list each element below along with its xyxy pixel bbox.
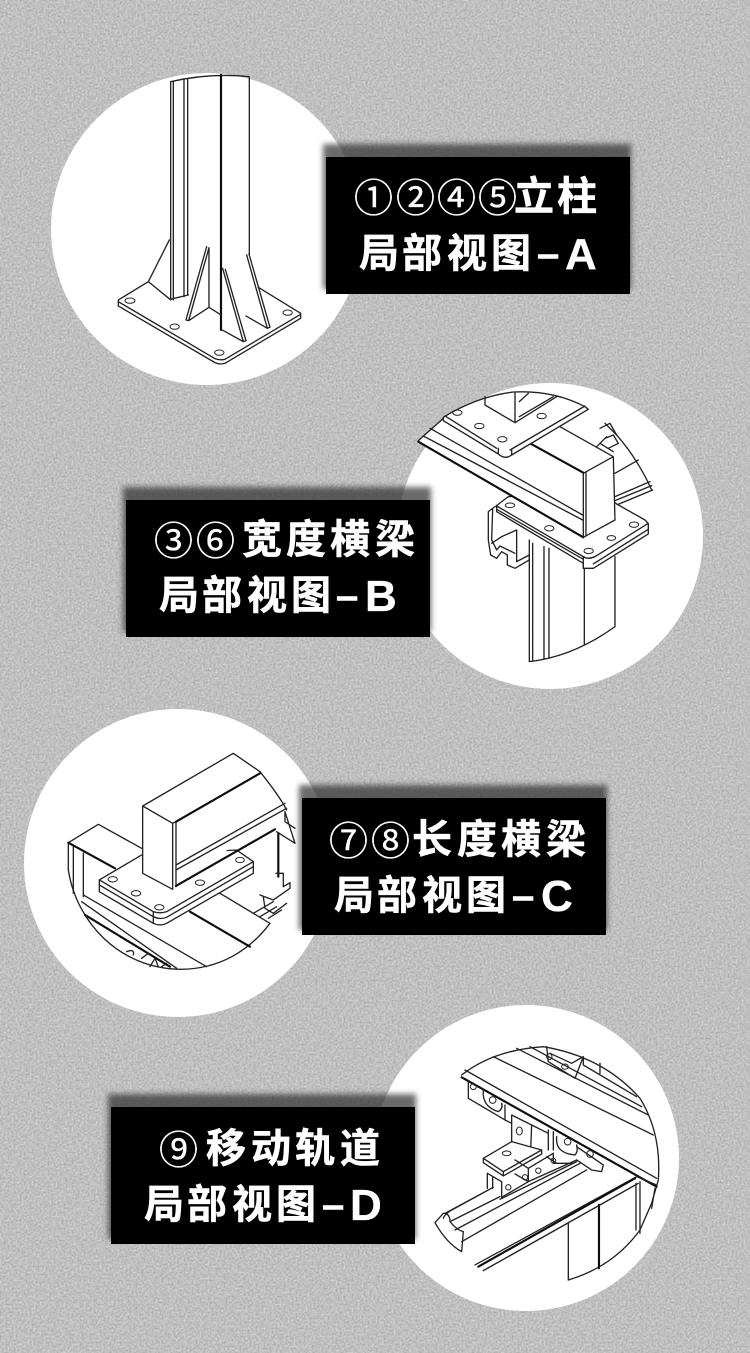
label box C xyxy=(302,798,606,935)
label text B: 局部视图 xyxy=(159,574,331,618)
label text D: ⑨ xyxy=(159,1120,198,1176)
label box B xyxy=(126,500,430,637)
circle B xyxy=(397,383,703,689)
label text A: 立柱 xyxy=(514,175,597,219)
shadow D xyxy=(108,1094,416,1239)
label text B: ③⑥ xyxy=(154,511,235,567)
label text C: 局部视图 xyxy=(334,874,506,918)
label text A xyxy=(354,168,597,279)
panel: view A column xyxy=(51,73,631,385)
drawing: length beam joint xyxy=(68,753,295,969)
label text B: 宽度横梁 xyxy=(242,518,415,562)
label text A: A xyxy=(565,230,597,279)
label text A: – xyxy=(537,232,559,276)
label text D: 移动轨道 xyxy=(206,1127,380,1171)
label text D: 局部视图 xyxy=(144,1183,316,1227)
drawing: column base xyxy=(118,75,301,364)
label text D: D xyxy=(350,1181,382,1230)
label text C xyxy=(329,811,586,921)
label text C: C xyxy=(541,872,573,921)
label box A xyxy=(326,157,630,294)
shadow B xyxy=(123,487,431,632)
shadow A xyxy=(323,144,631,289)
shadow C xyxy=(299,785,607,930)
label text D xyxy=(144,1120,382,1230)
panel: view C length beam xyxy=(24,709,607,1017)
label text A: 局部视图 xyxy=(359,232,531,276)
circle A xyxy=(51,73,363,385)
label text B: – xyxy=(336,574,358,618)
label text C: – xyxy=(512,874,534,918)
circle C xyxy=(24,709,332,1017)
label text B xyxy=(154,511,415,621)
label text D: – xyxy=(322,1183,344,1227)
panel: view D moving rail xyxy=(108,1005,679,1311)
circle D xyxy=(373,1005,679,1311)
drawing: width beam joint xyxy=(418,392,653,662)
label text A: ①②④⑤ xyxy=(354,168,517,224)
drawing: moving rail xyxy=(435,1047,659,1280)
label text B: B xyxy=(365,572,397,621)
label text C: ⑦⑧ xyxy=(329,811,410,867)
label box D xyxy=(111,1107,415,1244)
label text C: 长度横梁 xyxy=(412,818,586,862)
panel: view B width beam xyxy=(123,383,703,689)
